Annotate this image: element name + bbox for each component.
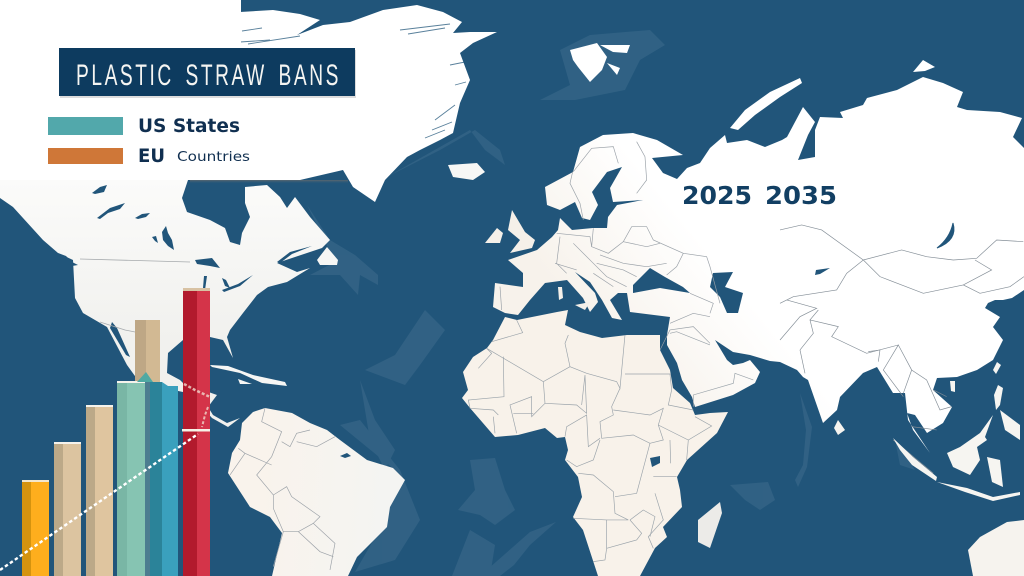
legend: EU Countries: EU (138, 145, 165, 167)
borders: Asia (780, 225, 1024, 473)
US Canada border (80, 259, 190, 335)
Greenland fjords (240, 24, 466, 138)
bar: red (183, 288, 210, 576)
map: Svalbard (570, 43, 630, 82)
Lake Victoria (650, 456, 660, 467)
bar: tan 2 (54, 442, 81, 576)
legend: EU Countries: Countries (177, 150, 250, 165)
Amazon mouth (340, 453, 351, 458)
bar: tan back (135, 320, 160, 390)
map: South America (228, 408, 405, 576)
Lake Baikal (937, 223, 954, 248)
years label: 2035 (765, 181, 837, 210)
map: Australia (968, 520, 1024, 576)
marker on red bar (182, 429, 210, 432)
map: Mediterranean islands (558, 287, 590, 310)
Greenland (240, 5, 497, 202)
map: Southeast Asia islands (893, 362, 1020, 501)
legend (48, 115, 250, 167)
header panel background (0, 0, 241, 180)
legend: EU Countries (48, 145, 250, 167)
trend line (0, 434, 198, 570)
title text: PLASTIC STRAW BANS (76, 59, 341, 92)
Black Sea (633, 268, 690, 293)
map: North America (0, 180, 330, 427)
map: Sri Lanka (834, 420, 845, 435)
map: Africa (462, 310, 753, 576)
legend: US States: US States (138, 115, 240, 137)
panel shadow (190, 180, 348, 184)
borders: Europe (500, 142, 720, 350)
bar: tan 3 (86, 405, 113, 576)
map: Severnaya Zemlya (913, 60, 935, 72)
borders: Africa (468, 320, 753, 562)
map: Madagascar (698, 502, 722, 548)
Central America over red bar (184, 384, 210, 427)
bar chart (0, 288, 210, 576)
map: Novaya Zemlya (730, 78, 802, 130)
Canadian and Great Lakes (58, 185, 312, 357)
title box (59, 48, 356, 98)
legend: US States (48, 115, 240, 137)
years label (682, 181, 837, 210)
bar: orange (22, 480, 49, 576)
lakes in Central Asia (815, 268, 830, 275)
map: Eurasia (493, 77, 1024, 473)
map: British Isles (485, 210, 535, 253)
bar: teal (117, 372, 153, 576)
map: Caribbean islands (210, 365, 287, 386)
years label: 2025 (682, 181, 752, 210)
Caspian Sea (710, 272, 743, 313)
Newfoundland (317, 247, 338, 265)
map: Iceland (448, 163, 485, 180)
bar: blue (145, 382, 178, 576)
borders: South America (230, 408, 335, 570)
ocean stipple patches (307, 30, 915, 576)
